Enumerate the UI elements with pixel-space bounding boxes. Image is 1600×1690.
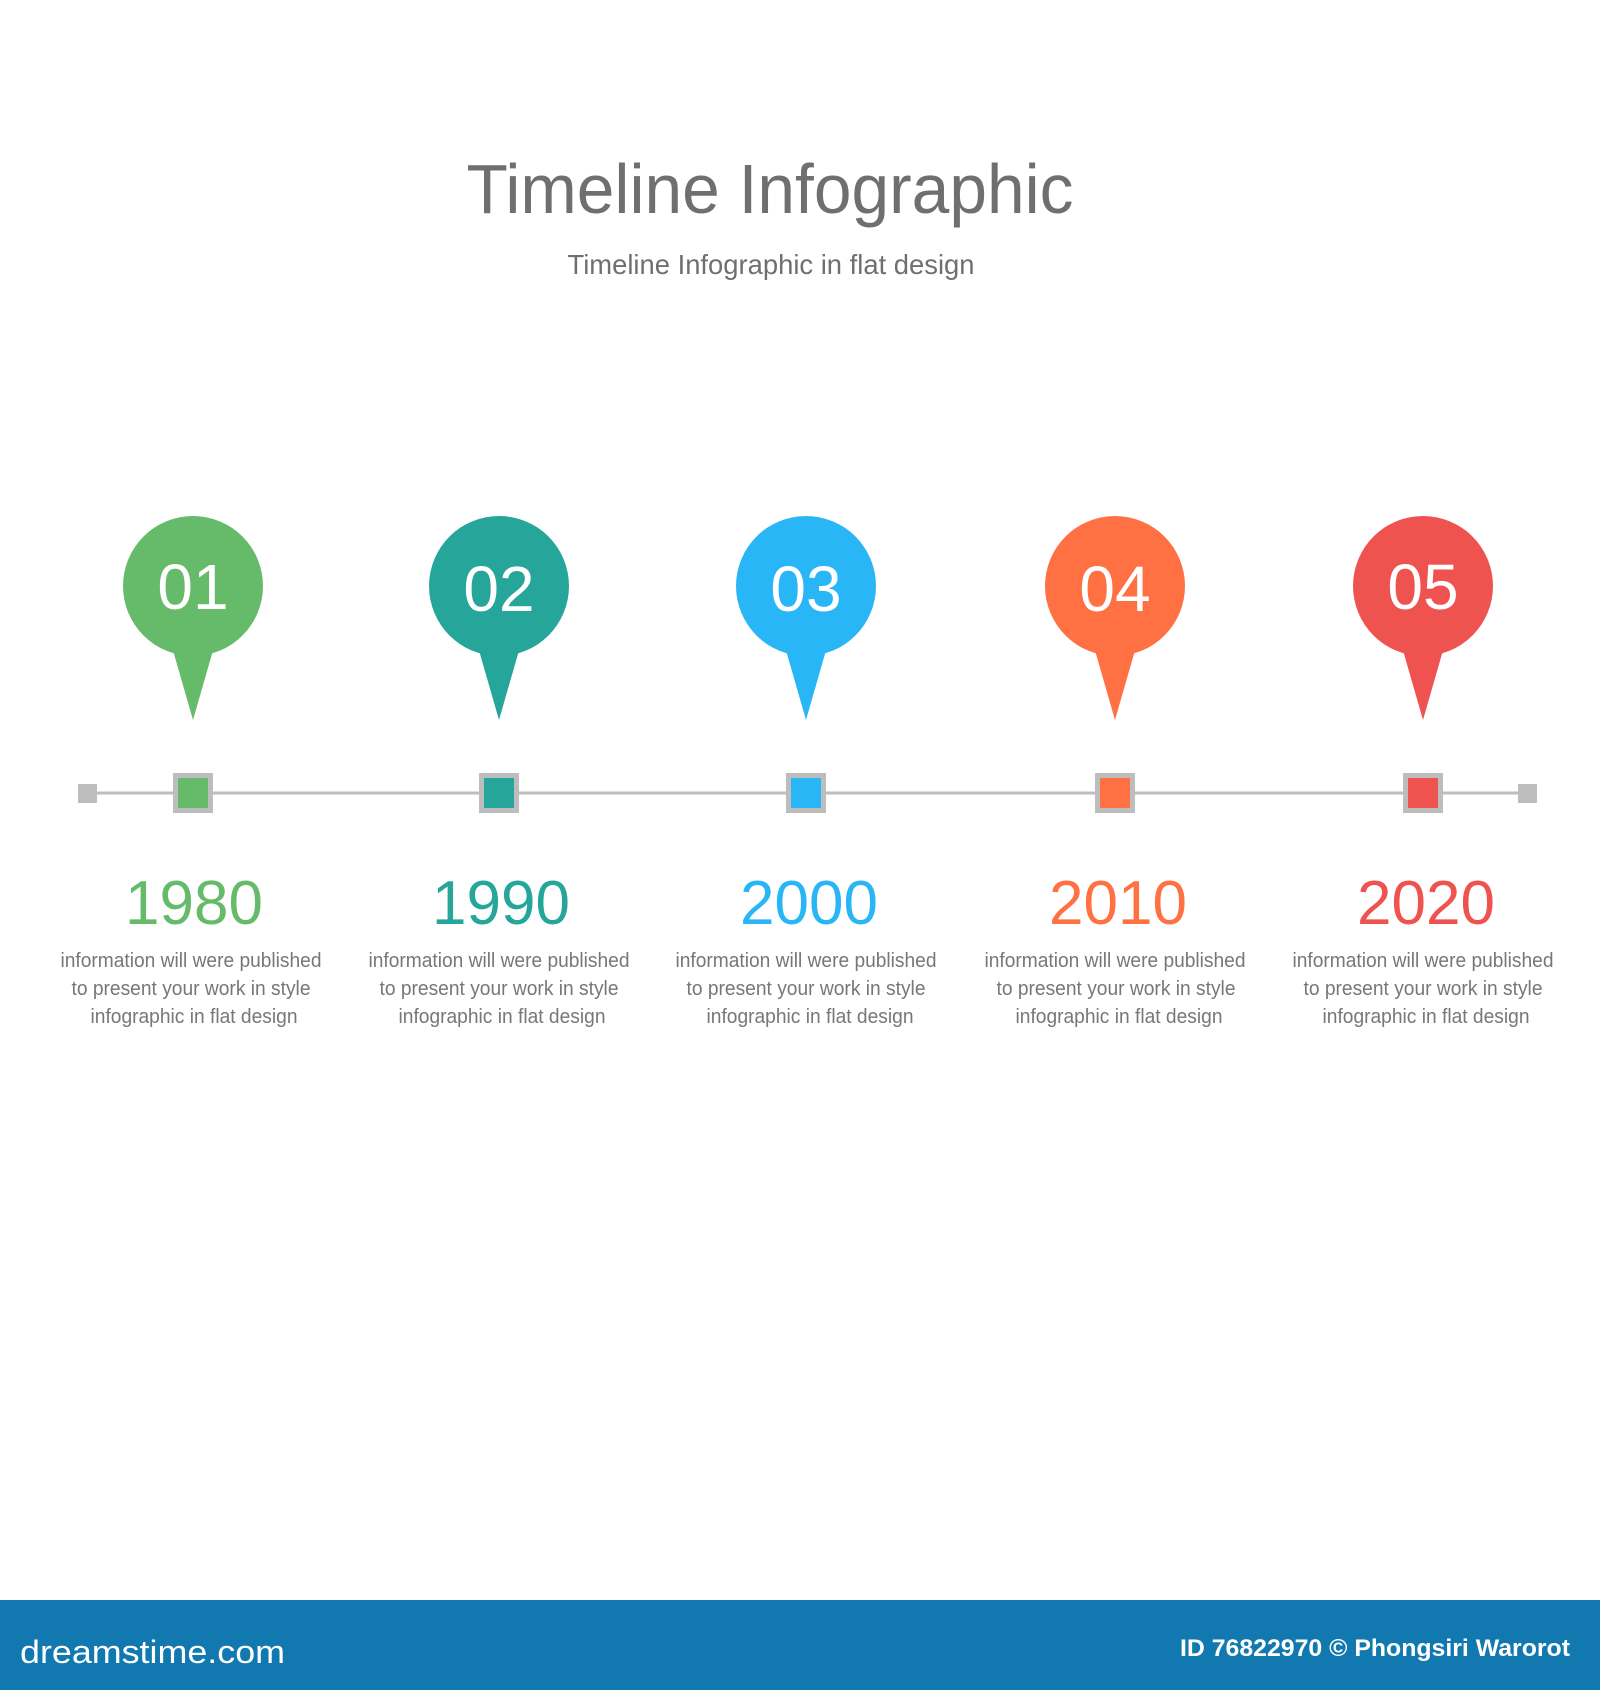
milestone 3 bbox=[676, 516, 936, 1028]
milestone 2 bbox=[368, 516, 630, 1028]
marker 5 bbox=[1406, 776, 1440, 810]
subtitle: Timeline Infographic in flat design bbox=[568, 249, 974, 280]
description 4: infographic in flat design bbox=[1016, 1006, 1222, 1028]
description 3: information will were published bbox=[676, 950, 936, 972]
description 1: information will were published bbox=[60, 950, 322, 972]
year 2020: 2020 bbox=[1357, 869, 1495, 938]
milestone 5 bbox=[1292, 516, 1554, 1028]
footer logo: dreamstime.com bbox=[20, 1634, 285, 1670]
description 1: to present your work in style bbox=[72, 978, 310, 1000]
pin 03 bbox=[736, 516, 876, 720]
description 1 bbox=[60, 950, 322, 1028]
year 2010: 2010 bbox=[1049, 869, 1187, 938]
description 5: information will were published bbox=[1292, 950, 1554, 972]
milestone 4 bbox=[984, 516, 1246, 1028]
marker 1 bbox=[176, 776, 210, 810]
pin 05: 05 bbox=[1387, 551, 1459, 623]
pin 05 bbox=[1353, 516, 1493, 720]
timeline line bbox=[78, 784, 1537, 803]
description 3: infographic in flat design bbox=[706, 1006, 914, 1028]
description 5: infographic in flat design bbox=[1322, 1006, 1530, 1028]
pin 01 bbox=[123, 516, 263, 720]
description 3: to present your work in style bbox=[686, 978, 926, 1000]
description 2: information will were published bbox=[368, 950, 630, 972]
description 3 bbox=[676, 950, 936, 1028]
description 4: information will were published bbox=[984, 950, 1246, 972]
footer credit: ID 76822970 © Phongsiri Warorot bbox=[1180, 1635, 1570, 1662]
description 2 bbox=[368, 950, 630, 1028]
description 2: to present your work in style bbox=[380, 978, 618, 1000]
description 1: infographic in flat design bbox=[90, 1006, 298, 1028]
marker 3 bbox=[788, 776, 824, 810]
year 2000: 2000 bbox=[740, 869, 878, 938]
pin 04 bbox=[1045, 516, 1185, 720]
description 5 bbox=[1292, 950, 1554, 1028]
pin 01: 01 bbox=[157, 551, 229, 623]
pin 04: 04 bbox=[1079, 553, 1151, 625]
title: Timeline Infographic bbox=[466, 150, 1074, 228]
pin 03: 03 bbox=[770, 553, 842, 625]
pin 02 bbox=[429, 516, 569, 720]
milestone 1 bbox=[60, 516, 322, 1028]
year 1990: 1990 bbox=[432, 869, 570, 938]
description 4: to present your work in style bbox=[996, 978, 1236, 1000]
footer bar bbox=[0, 1600, 1600, 1690]
year 1980: 1980 bbox=[125, 869, 263, 938]
marker 2 bbox=[482, 776, 516, 810]
marker 4 bbox=[1098, 776, 1132, 810]
pin 02: 02 bbox=[463, 553, 535, 625]
description 2: infographic in flat design bbox=[398, 1006, 606, 1028]
description 5: to present your work in style bbox=[1304, 978, 1542, 1000]
description 4 bbox=[984, 950, 1246, 1028]
